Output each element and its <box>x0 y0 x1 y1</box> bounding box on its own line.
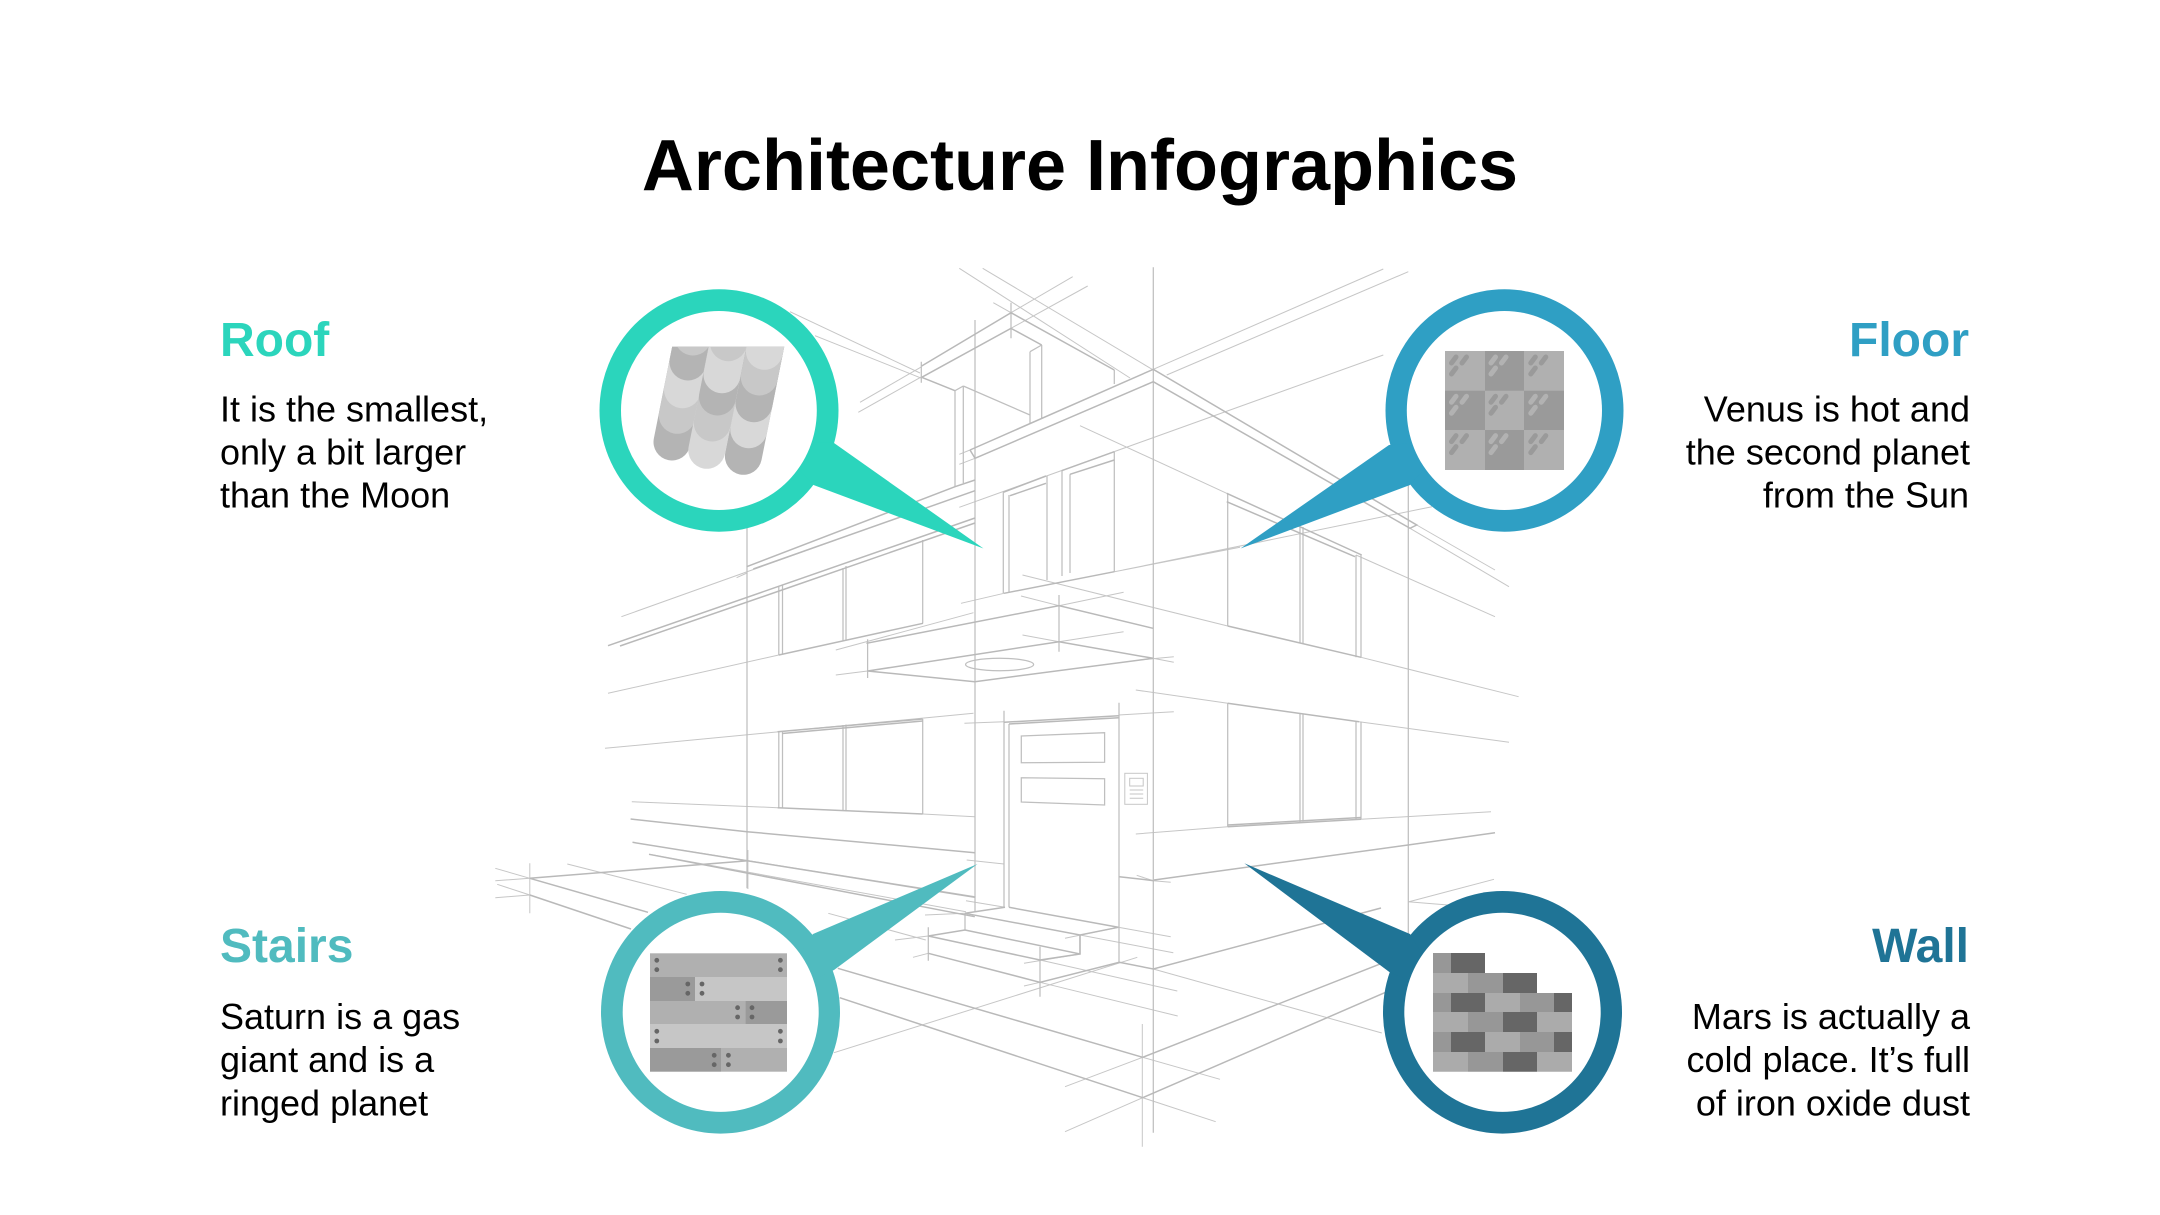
construction lines <box>495 268 1519 1147</box>
wall text: of iron oxide dust <box>1696 1082 1970 1123</box>
floor text: from the Sun <box>1763 475 1969 516</box>
main structure lines <box>747 267 1408 1133</box>
panel: floor <box>1240 289 1970 548</box>
canopy light <box>966 658 1034 671</box>
icon: roof tiles <box>672 330 769 456</box>
roof text: than the Moon <box>220 475 450 516</box>
stairs text: Saturn is a gas <box>220 996 460 1037</box>
roof callout ring <box>600 289 984 548</box>
icon: floor tiles <box>1445 351 1564 470</box>
floor callout ring <box>1240 289 1624 548</box>
icon: stair planks <box>650 953 787 1072</box>
door panels <box>1021 733 1105 805</box>
floor heading: Floor <box>1849 314 1969 367</box>
stairs text: giant and is a <box>220 1039 435 1080</box>
wall callout ring <box>1244 863 1622 1134</box>
roof text: only a bit larger <box>220 432 466 472</box>
floor text: Venus is hot and <box>1704 388 1970 429</box>
floor text: the second planet <box>1686 432 1970 472</box>
icon: brick wall <box>1433 953 1572 1072</box>
panel: wall <box>1244 863 1971 1134</box>
panel: roof <box>220 289 984 548</box>
building wireframe sketch <box>495 267 1519 1147</box>
title: Architecture Infographics <box>642 126 1518 206</box>
stairs callout ring <box>601 864 978 1134</box>
roof text: It is the smallest, <box>220 388 488 429</box>
intercom <box>1125 773 1147 804</box>
wall text: Mars is actually a <box>1692 996 1971 1037</box>
roof heading: Roof <box>220 314 330 367</box>
roof and edge lines <box>530 313 1495 1098</box>
wall text: cold place. It’s full <box>1687 1039 1970 1080</box>
stairs text: ringed planet <box>220 1082 428 1123</box>
panel: stairs <box>220 864 978 1134</box>
wall heading: Wall <box>1872 920 1969 973</box>
stairs heading: Stairs <box>220 920 353 973</box>
